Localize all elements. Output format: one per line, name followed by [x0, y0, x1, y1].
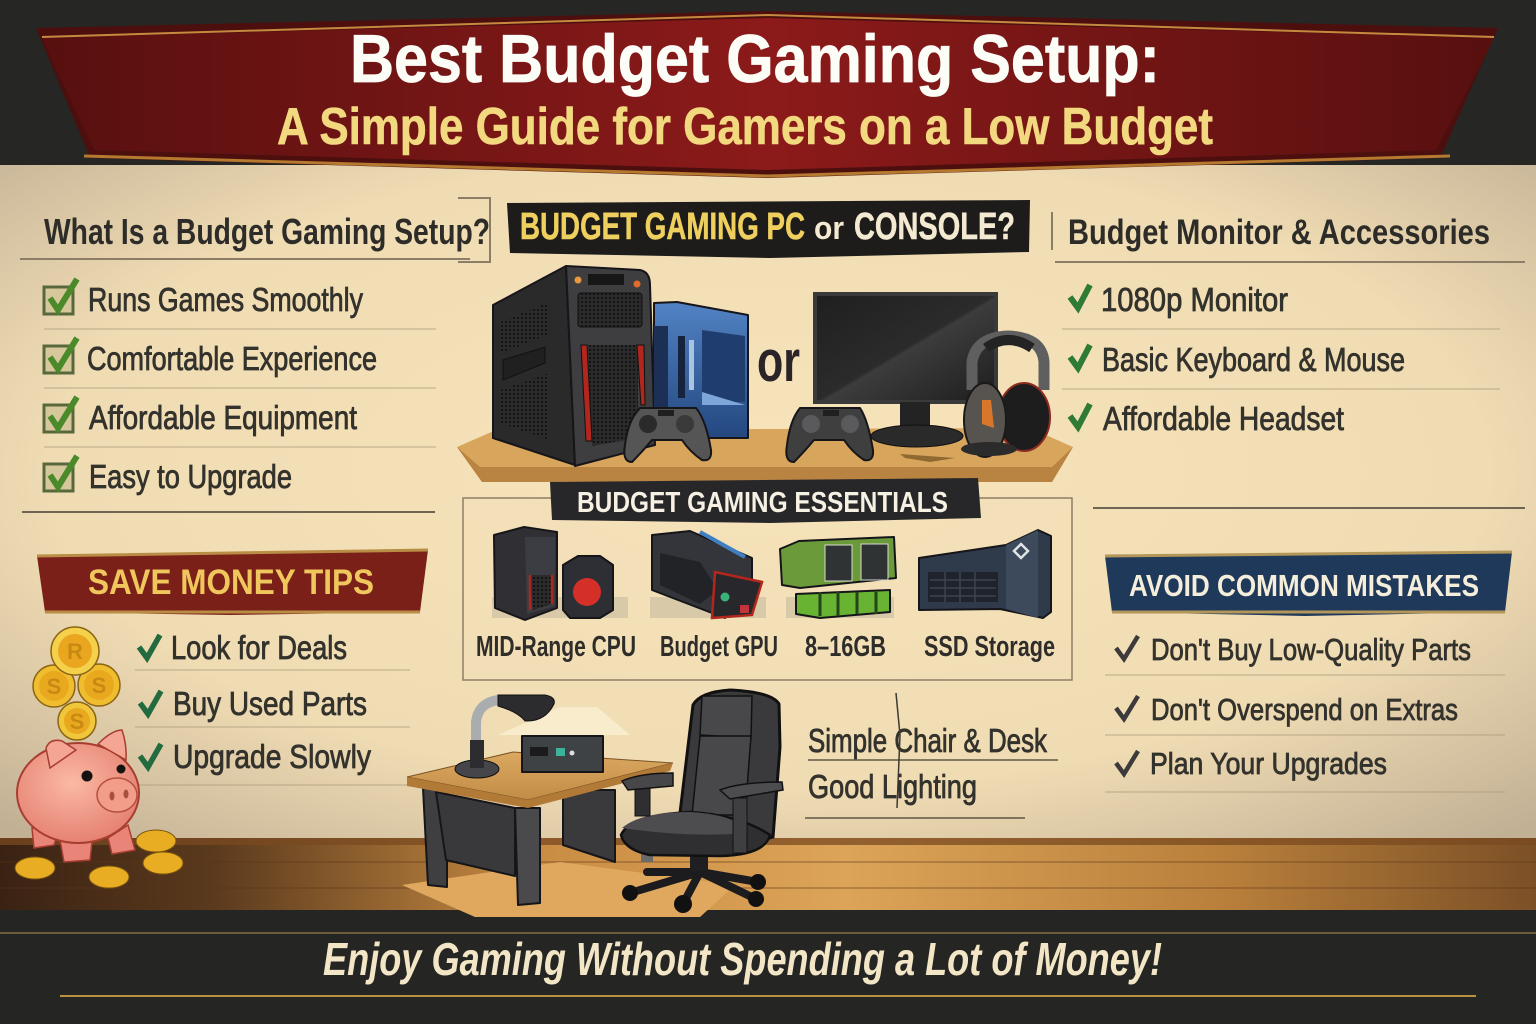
- mistakes list: Plan Your Upgrades: [1150, 746, 1387, 781]
- icon: blue console: [654, 302, 748, 438]
- label: 8–16GB: [805, 631, 886, 663]
- icon: lamp: [455, 695, 630, 778]
- ribbon: [37, 550, 428, 615]
- icon: mini PC on desk: [522, 736, 603, 772]
- center heading: PC or console: CONSOLE?: [854, 206, 1015, 248]
- tips list: Look for Deals: [171, 629, 347, 666]
- panel: avoid common mistakes: [1105, 552, 1512, 792]
- icon: gold coins falling: [33, 627, 120, 740]
- item: RAM: [780, 537, 896, 663]
- mistakes list: Don't Buy Low-Quality Parts: [1151, 632, 1471, 667]
- checklist: [44, 279, 436, 495]
- tips list: [135, 629, 410, 785]
- center heading: PC or console: or: [814, 210, 844, 246]
- icon: coins on floor: [15, 830, 183, 888]
- ribbon: AVOID COMMON MISTAKES: [1129, 568, 1479, 603]
- text: chair and lighting: [805, 693, 1058, 818]
- mistakes list: Don't Overspend on Extras: [1151, 692, 1458, 727]
- label: Budget GPU: [660, 631, 778, 663]
- icon: gold coins falling: S: [70, 709, 84, 734]
- ribbon: [1105, 552, 1512, 616]
- icon: monitor: [815, 294, 996, 447]
- heading ribbon: BUDGET GAMING ESSENTIALS: [577, 487, 948, 519]
- icon: headset: [961, 336, 1050, 457]
- label: SSD Storage: [924, 631, 1055, 663]
- checklist: Easy to Upgrade: [89, 458, 292, 495]
- checklist: Runs Games Smoothly: [88, 281, 363, 318]
- connector word: or: or: [757, 329, 800, 394]
- item: GPU: [650, 531, 778, 663]
- footer slogan: Enjoy Gaming Without Spending a Lot of Money!: [323, 933, 1162, 985]
- checklist: Affordable Equipment: [89, 399, 357, 436]
- footer band: [0, 910, 1536, 1024]
- wooden floor: [0, 838, 1536, 912]
- text: chair and lighting: Simple Chair & Desk: [808, 722, 1047, 759]
- tips list: Buy Used Parts: [173, 685, 367, 722]
- checklist: Basic Keyboard & Mouse: [1102, 341, 1405, 378]
- mistakes list: [1105, 632, 1505, 792]
- icon: gold coins falling: R: [67, 639, 83, 664]
- label: MID-Range CPU: [476, 631, 636, 663]
- checklist: 1080p Monitor: [1101, 281, 1288, 318]
- panel: save money tips: [37, 550, 428, 785]
- tips list: Upgrade Slowly: [173, 738, 371, 775]
- center heading: PC or console: [507, 200, 1030, 258]
- icon: piggy bank: [17, 730, 139, 862]
- icon: controller left: [624, 408, 711, 462]
- icon: gold coins falling: S: [92, 673, 106, 698]
- title banner: [36, 11, 1498, 178]
- center heading: PC or console: BUDGET GAMING PC: [520, 206, 805, 248]
- item: CPU: [476, 527, 636, 663]
- heading: What Is a Budget Gaming Setup?: [44, 211, 490, 252]
- item: SSD: [919, 530, 1055, 663]
- text: chair and lighting: Good Lighting: [808, 768, 977, 805]
- checklist: Affordable Headset: [1103, 400, 1344, 437]
- checklist: Comfortable Experience: [87, 340, 377, 377]
- title: Best Budget Gaming Setup:: [350, 21, 1160, 97]
- subtitle: A Simple Guide for Gamers on a Low Budget: [277, 98, 1213, 156]
- icon: PC tower: [493, 266, 655, 466]
- checklist: [1062, 281, 1500, 437]
- icon: office chair: [621, 690, 783, 913]
- heading ribbon: [550, 478, 981, 523]
- icon: gold coins falling: S: [47, 674, 61, 699]
- wooden platform under desk: [402, 862, 735, 917]
- panel: what is a budget gaming setup: [20, 198, 490, 512]
- background: parchment panel: [0, 165, 1536, 845]
- ribbon: SAVE MONEY TIPS: [88, 563, 374, 602]
- panel: monitor and accessories: [1052, 212, 1525, 508]
- wooden shelf: [457, 428, 1073, 482]
- icon: desk: [407, 752, 673, 905]
- icon: controller right: [786, 408, 873, 462]
- panel: budget gaming essentials: [463, 478, 1072, 680]
